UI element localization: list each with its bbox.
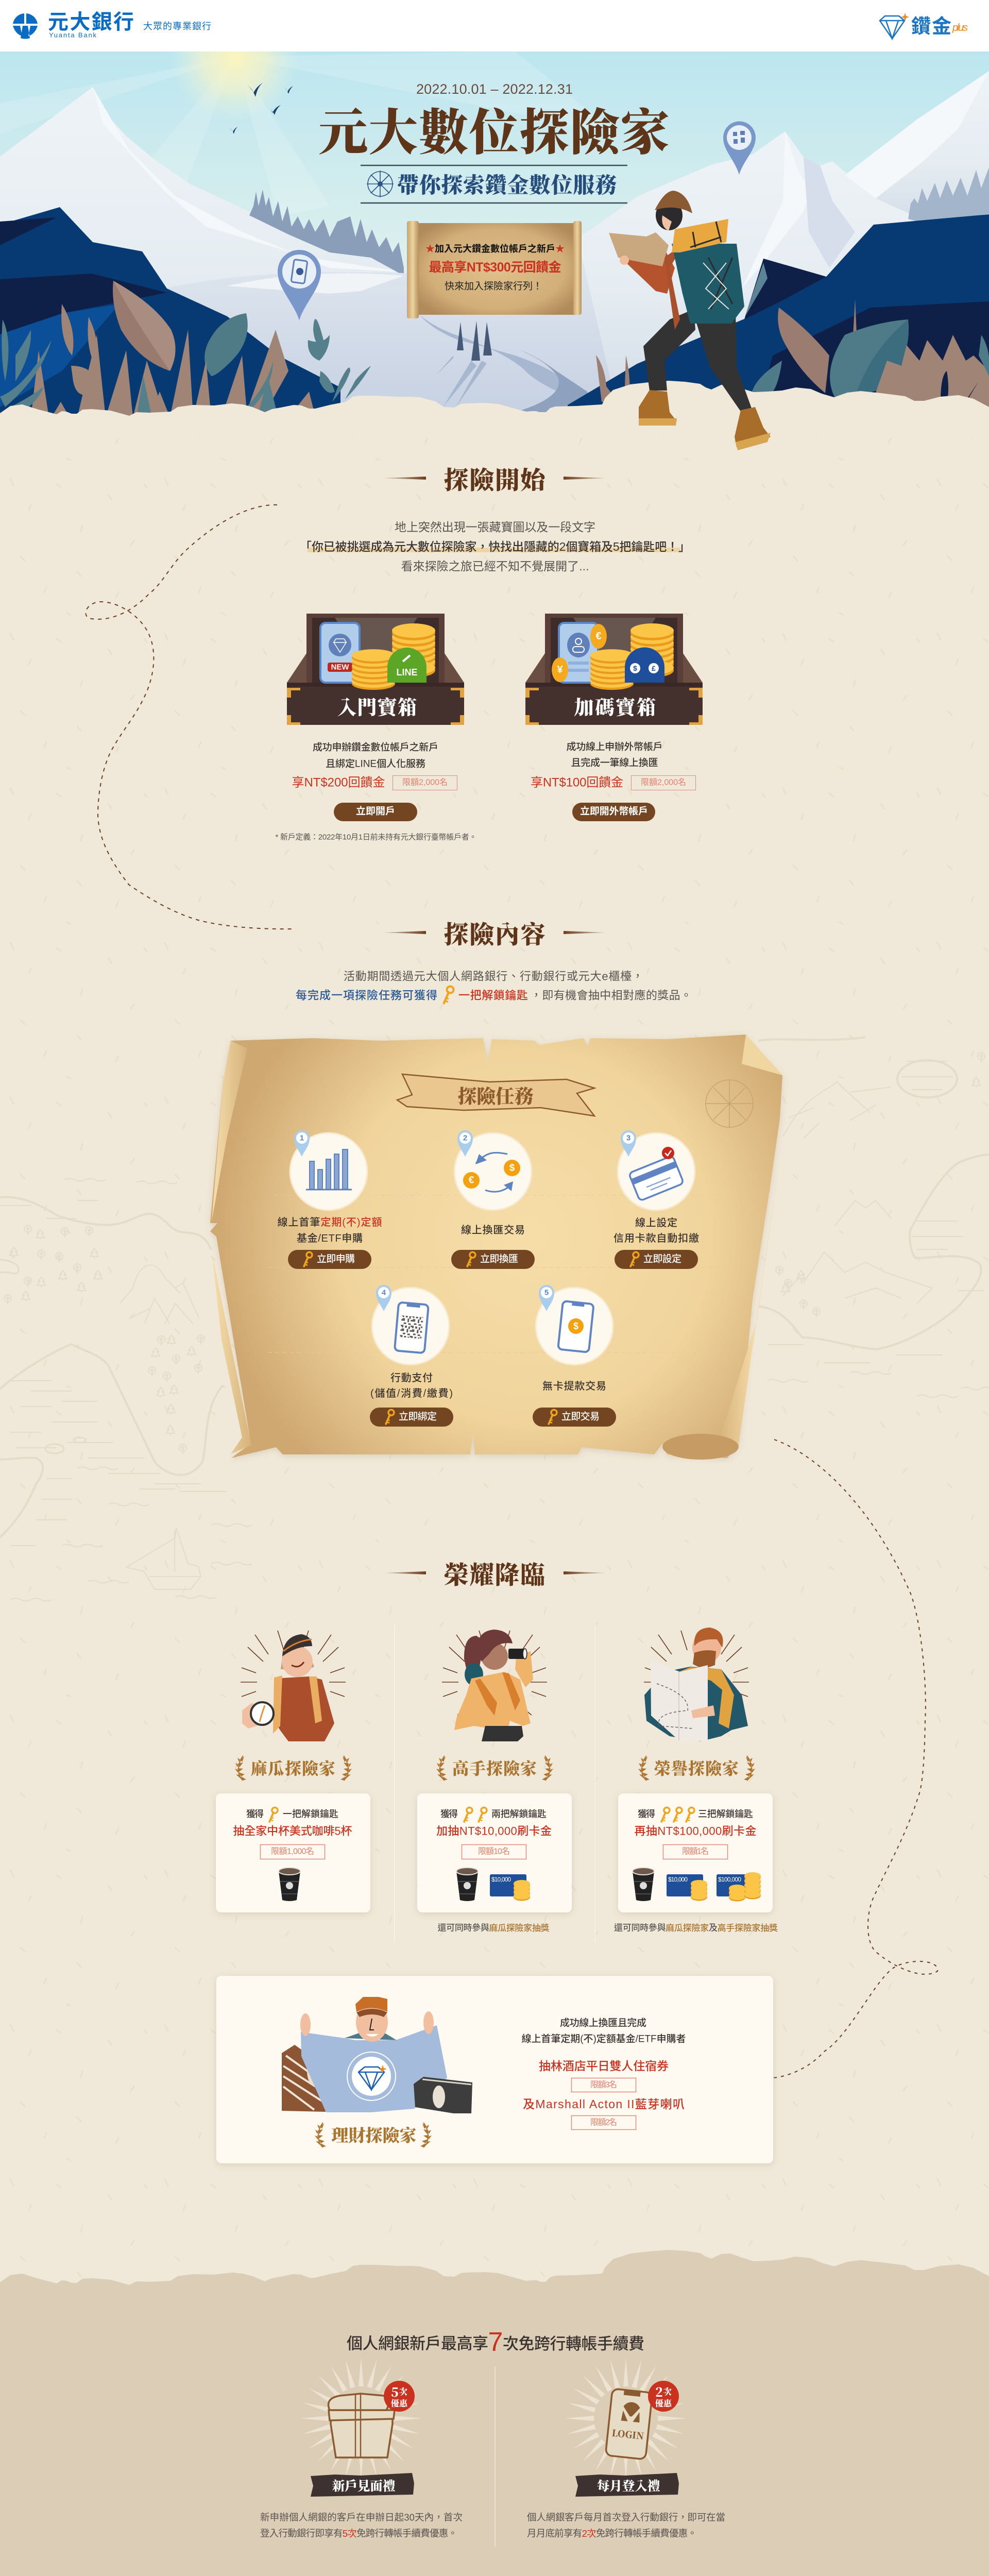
chest terms: 成功申辦鑽金數位帳戶之新戶 <box>313 741 438 753</box>
background map right <box>758 1037 989 1397</box>
birds <box>229 82 293 134</box>
button: 立即換匯: 立即換匯 <box>480 1253 518 1264</box>
mission 5: 無卡提款交易 <box>542 1380 606 1392</box>
treasure chest: 加碼寶箱 <box>525 614 703 821</box>
logo: Yuanta Bank <box>13 11 211 39</box>
icon: credit cards with coins: $10,000 <box>668 1876 688 1883</box>
prize card: 一把解鎖鑰匙 <box>283 1809 338 1819</box>
phone with diamond <box>320 623 360 683</box>
chest label: 加碼寶箱 <box>574 691 656 720</box>
chest terms: 限額2,000名 <box>402 778 448 787</box>
badge: 5次優惠: 優惠 <box>391 2397 408 2409</box>
euro and yen coins: ¥ <box>557 664 563 675</box>
dark blue mountains <box>0 207 989 417</box>
badge: 2次優惠: 2次 <box>655 2382 672 2400</box>
rank title: 麻瓜探險家 <box>251 1756 335 1780</box>
icon: burst and phone <box>565 2358 687 2479</box>
dashed trail 2 <box>774 1439 937 2078</box>
prize card <box>618 1793 773 1912</box>
rank title: 高手探險家 <box>452 1756 537 1780</box>
prize card: 獲得 <box>638 1809 655 1819</box>
sky and sun <box>0 52 989 413</box>
hero title: 元大數位探險家 <box>318 94 670 164</box>
prize card: 三把解鎖鑰匙 <box>698 1809 753 1819</box>
brush label: 新戶見面禮 <box>332 2476 396 2495</box>
icon: credit card with coins: $10,000 <box>491 1876 511 1883</box>
footnote: new account definition: * 新戶定義：2022年10月1日前未持有元大銀行臺幣帳戶者。 <box>275 833 477 842</box>
mission 3: 信用卡款自動扣繳 <box>613 1232 699 1244</box>
offer scroll: ★加入元大鑽金數位帳戶之新戶★ <box>425 243 565 254</box>
exchange badge: £ <box>652 664 656 672</box>
description <box>260 2512 463 2539</box>
illustration: wealth explorer <box>282 1997 472 2113</box>
icon: cardless withdrawal: 5 <box>544 1288 549 1297</box>
logo: 鑽金 plus: plus <box>952 22 968 33</box>
logo: Yuanta Bank: Yuanta Bank <box>49 31 97 39</box>
foreground plants: left <box>0 281 371 417</box>
logo: 鑽金 plus <box>880 13 968 39</box>
prize card: 兩把解鎖鑰匙 <box>491 1809 547 1819</box>
button: 立即綁定: 立即綁定 <box>399 1411 437 1422</box>
intro text: 「你已被挑選成為元大數位探險家，快找出隱藏的2個寶箱及5把鑰匙吧！」 <box>300 540 690 553</box>
button: 立即申購: 立即申購 <box>317 1253 355 1264</box>
rank title <box>235 1756 352 1781</box>
button: 立即開外幣帳戶: 立即開外幣帳戶 <box>580 805 648 817</box>
intro text <box>300 520 690 573</box>
button: 立即開戶 <box>334 803 417 821</box>
background map left <box>0 1179 252 1601</box>
brush label <box>311 2473 414 2497</box>
hiker <box>609 191 771 450</box>
button: 立即設定 <box>615 1250 698 1269</box>
compass watermark <box>706 1080 753 1127</box>
icon: QR phone: 4 <box>382 1288 386 1297</box>
icon: currency exchange: 2 <box>463 1133 467 1143</box>
qualification text <box>521 2018 686 2044</box>
map pin: phone <box>278 250 321 320</box>
logo: 鑽金 plus: 鑽金 <box>911 16 951 38</box>
bonus note: 還可同時參與麻瓜探險家抽獎 <box>438 1923 549 1933</box>
icon: credit cards with coins <box>667 1872 761 1901</box>
qualification text: 線上首筆定期(不)定額基金/ETF申購者 <box>521 2033 686 2044</box>
section: free transfers background <box>0 2250 989 2576</box>
mission 1: 線上首筆定期(不)定額 <box>277 1216 382 1228</box>
rank title: 榮譽探險家 <box>654 1756 739 1780</box>
description: 個人網銀客戶每月首次登入行動銀行，即可在當 <box>527 2512 725 2522</box>
badge: NEW: NEW <box>331 663 349 672</box>
button: 立即開戶: 立即開戶 <box>356 805 395 817</box>
prize card: 獲得 <box>440 1809 458 1819</box>
chest terms <box>531 741 695 790</box>
header bar <box>0 0 989 52</box>
icon: currency exchange: € <box>469 1175 474 1186</box>
coin stacks <box>590 623 674 690</box>
panel: 理財探險家 <box>216 1976 773 2163</box>
section heading: 探險開始 <box>383 461 606 496</box>
perk: monthly login <box>527 2358 725 2539</box>
LINE badge: LINE <box>396 667 418 677</box>
mission 5 <box>533 1285 616 1427</box>
phone with profile <box>559 623 598 683</box>
mission intro text: 活動期間透過元大個人網路銀行、行動銀行或元大e櫃檯， <box>344 970 643 983</box>
button: 立即換匯 <box>451 1250 535 1269</box>
hero date: 2022.10.01 – 2022.12.31 <box>416 81 573 97</box>
prize column: 高手探險家 <box>417 1630 572 1933</box>
icon: QR phone <box>372 1285 449 1365</box>
prize: hotel: 限額3名 <box>590 2080 617 2090</box>
hero illustration <box>0 52 989 450</box>
prize column: 榮譽探險家 <box>614 1628 778 1933</box>
euro and yen coins: € <box>595 631 602 642</box>
icon: credit card with coins <box>490 1874 530 1901</box>
parchment sheet <box>210 1035 782 1460</box>
badge: NEW <box>328 663 352 672</box>
description: 登入行動銀行即享有5次免跨行轉帳手續費優惠。 <box>260 2528 457 2539</box>
heading: free transfer fee: 次免跨行轉帳手續費 <box>503 2335 644 2352</box>
LINE badge <box>387 648 427 683</box>
torn paper ground <box>0 381 989 438</box>
qualification text: 成功線上換匯且完成 <box>560 2018 646 2029</box>
prize: speaker <box>523 2097 685 2130</box>
distant tree lines <box>249 167 989 276</box>
ribbon title: 探險任務: 探險任務 <box>457 1081 534 1109</box>
prize card: 限額10名 <box>478 1846 510 1856</box>
mission intro text: 一把解鎖鑰匙 <box>458 989 528 1002</box>
mission intro text: 每完成一項探險任務可獲得 <box>296 989 437 1002</box>
icon: currency exchange: $ <box>509 1162 515 1174</box>
prize card <box>216 1793 370 1912</box>
rank title <box>436 1756 553 1781</box>
button: 立即交易: 立即交易 <box>561 1411 600 1422</box>
mission 4: 行動支付 <box>390 1372 433 1384</box>
chest terms: 且綁定LINE個人化服務 <box>326 758 425 770</box>
icon: cardless withdrawal <box>536 1285 613 1365</box>
button: 立即交易 <box>533 1408 616 1427</box>
description <box>527 2512 725 2539</box>
button: 立即申購 <box>288 1250 371 1269</box>
icon: cardless withdrawal: $ <box>573 1321 578 1331</box>
prize column: 麻瓜探險家 <box>216 1631 370 1912</box>
description: 新申辦個人網銀的客戶在申辦日起30天內，首次 <box>260 2512 463 2522</box>
mission 4 <box>370 1285 453 1427</box>
badge: 5次優惠 <box>384 2381 415 2412</box>
offer scroll <box>407 221 582 318</box>
offer scroll: 快來加入探險家行列！ <box>445 280 542 292</box>
prize card: 限額1,000名 <box>271 1846 314 1856</box>
chest terms: 享NT$200回饋金 <box>292 776 385 789</box>
mission 3 <box>613 1130 699 1269</box>
icon: coffee cup <box>633 1868 654 1901</box>
prize card: 限額1名 <box>682 1846 709 1856</box>
brush label: 每月登入禮 <box>596 2476 660 2495</box>
rank title: 理財探險家 <box>332 2123 416 2146</box>
icon: credit cards with coins: $100,000 <box>718 1876 741 1883</box>
prize card: 再抽NT$100,000刷卡金 <box>635 1825 756 1837</box>
badge: 2次優惠 <box>648 2381 679 2412</box>
ribbon title: 探險任務 <box>397 1074 594 1116</box>
icon: coffee cup <box>456 1868 478 1901</box>
chest terms: 限額2,000名 <box>641 778 686 787</box>
mission intro text <box>296 970 692 1003</box>
button: 立即設定: 立即設定 <box>643 1253 681 1264</box>
button: 立即綁定 <box>370 1408 453 1427</box>
coin stacks <box>352 623 435 690</box>
treasure chest: 入門寶箱 <box>287 614 464 821</box>
prize: hotel <box>539 2059 669 2092</box>
valley and river <box>155 258 618 412</box>
exchange badge <box>625 647 664 683</box>
logo: Yuanta Bank: 元大銀行 <box>48 11 134 33</box>
prize card: 獲得 <box>246 1809 264 1819</box>
mission 2: 線上換匯交易 <box>461 1224 525 1236</box>
chest terms: 成功線上申辦外幣帳戶 <box>567 741 662 752</box>
mission 1: 基金/ETF申購 <box>297 1232 363 1244</box>
illustration: honored explorer <box>644 1628 749 1741</box>
icon: coffee cup <box>279 1868 300 1901</box>
icon: bar chart <box>290 1130 367 1210</box>
section heading: 榮耀降臨: 榮耀降臨 <box>443 1555 545 1591</box>
intro text: 地上突然出現一張藏寶圖以及一段文字 <box>395 520 595 534</box>
map pin: QR <box>723 122 756 175</box>
heading: free transfer fee: 個人網銀新戶最高享 <box>347 2335 488 2352</box>
badge: 5次優惠: 5次 <box>391 2382 407 2400</box>
snowy mountains <box>0 71 989 412</box>
prize card: 抽全家中杯美式咖啡5杯 <box>233 1825 352 1837</box>
mission 3: 線上設定 <box>635 1217 677 1229</box>
chest terms: 且完成一筆線上換匯 <box>571 757 658 769</box>
illustration: muggle explorer <box>241 1631 346 1741</box>
rank title <box>638 1756 755 1781</box>
illustration: expert explorer <box>442 1630 547 1741</box>
section heading: 探險內容: 探險內容 <box>444 915 545 950</box>
bonus note: 還可同時參與麻瓜探險家及高手探險家抽獎 <box>614 1923 778 1933</box>
logo: Yuanta Bank: 大眾的專業銀行 <box>143 21 211 31</box>
chest body <box>287 614 464 725</box>
parchment panel: missions <box>210 1035 782 1460</box>
foreground plants: right <box>596 299 989 407</box>
subtitle band: 帶你探索鑽金數位服務 <box>397 168 617 199</box>
mission 4: (儲值/消費/繳費) <box>370 1387 453 1399</box>
mission intro text: ，即有機會抽中相對應的獎品。 <box>531 989 692 1002</box>
icon: credit card: 3 <box>626 1133 630 1143</box>
intro text: 看來探險之旅已經不知不覺展開了... <box>401 560 589 573</box>
euro and yen coins <box>552 624 607 682</box>
exchange badge: $ <box>633 664 637 672</box>
heading: free transfer fee: 7 <box>488 2327 503 2357</box>
badge: 2次優惠: 優惠 <box>655 2397 673 2409</box>
chest label: 入門寶箱 <box>337 691 417 720</box>
chest terms <box>292 741 457 790</box>
mission 1 <box>277 1130 382 1269</box>
icon: credit card <box>618 1130 695 1210</box>
offer scroll: 最高享NT$300元回饋金 <box>429 260 561 275</box>
subtitle band <box>361 165 627 203</box>
prize: hotel: 抽林酒店平日雙人住宿券 <box>539 2059 669 2073</box>
icon: burst and phone: LOGIN <box>611 2426 645 2443</box>
button: 立即開外幣帳戶 <box>572 803 655 821</box>
prize: speaker: 限額2名 <box>590 2117 617 2127</box>
chest body <box>525 614 703 725</box>
prize: speaker: 及Marshall Acton II藍芽喇叭 <box>523 2097 685 2111</box>
section heading: 探險內容 <box>383 915 606 950</box>
mission 2 <box>451 1130 535 1269</box>
prize card <box>417 1793 572 1912</box>
icon: bar chart: 1 <box>300 1133 304 1143</box>
dashed trail 1 <box>86 505 294 929</box>
perk: new account gift <box>260 2358 463 2539</box>
icon: burst and gift <box>300 2358 422 2479</box>
section heading: 探險開始: 探險開始 <box>444 461 548 496</box>
icon: currency exchange <box>454 1130 532 1210</box>
prize card: 加抽NT$10,000刷卡金 <box>436 1825 552 1837</box>
description: 月月底前享有2次免跨行轉帳手續費優惠。 <box>527 2528 697 2539</box>
chest terms: 享NT$100回饋金 <box>531 776 623 789</box>
brush label <box>575 2473 679 2497</box>
section heading: 榮耀降臨 <box>384 1555 606 1591</box>
